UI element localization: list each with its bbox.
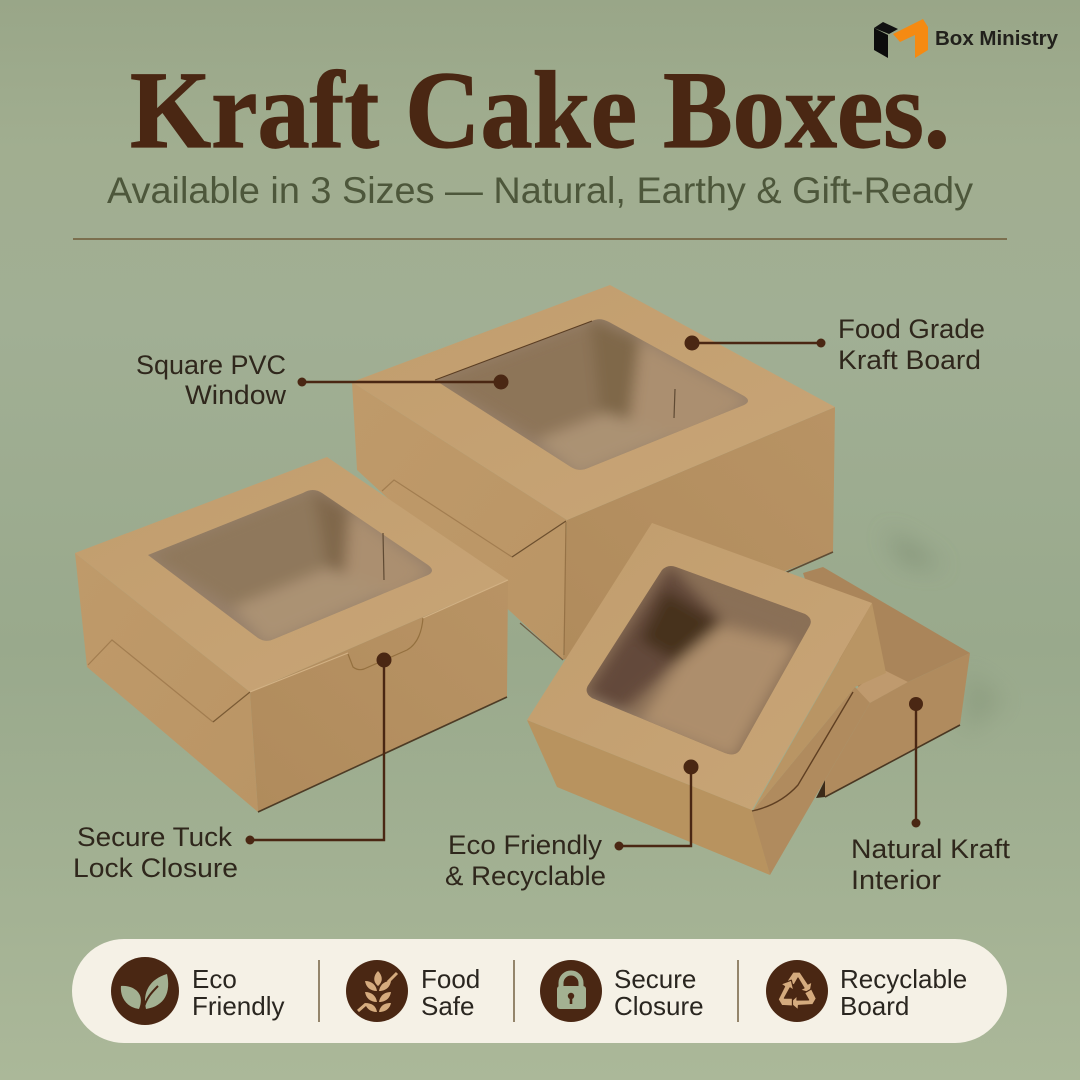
callout: food grade kraft board [684,314,985,375]
small kraft box [75,457,508,812]
subtitle: Available in 3 Sizes — Natural, Earthy & Gift-Ready [107,170,974,211]
icon: recycle [766,960,828,1022]
icon: padlock [540,960,602,1022]
callout: square PVC window [136,350,508,410]
callout: square PVC window: Square PVC [136,350,286,380]
floor shadows [885,530,1005,735]
callout: eco friendly and recyclable: Eco Friendly [448,830,603,860]
callout: secure tuck lock closure [73,652,392,883]
logo: Box Ministry [874,19,1059,58]
callout: secure tuck lock closure: Secure Tuck [77,822,233,852]
text: food safe: Food [421,964,480,994]
large kraft box [352,285,835,660]
title: Kraft Cake Boxes. [130,49,950,171]
front kraft box lid [527,523,886,875]
callout: food grade kraft board: Kraft Board [838,345,981,375]
logo: Box Ministry: Box Ministry [935,28,1059,50]
text: recyclable board: Recyclable [840,964,967,994]
callout: secure tuck lock closure: Lock Closure [73,853,238,883]
large box window [436,319,748,470]
text: eco friendly: Friendly [192,991,284,1021]
callout: natural kraft interior: Natural Kraft [851,834,1011,864]
front box window [580,560,815,760]
callout: natural kraft interior: Interior [851,865,941,895]
text: secure closure: Closure [614,991,704,1021]
callout: food grade kraft board: Food Grade [838,314,985,344]
small box window [148,490,432,641]
open box base [803,567,970,798]
text: eco friendly [192,964,284,1021]
icon: leaves [111,957,179,1025]
text: food safe: Safe [421,991,474,1021]
callout: eco friendly and recyclable: & Recyclable [445,861,606,891]
text: secure closure: Secure [614,964,696,994]
callout: natural kraft interior [851,697,1011,895]
callout: eco friendly and recyclable [445,760,698,891]
text: recyclable board: Board [840,991,909,1021]
callout: square PVC window: Window [185,380,287,410]
feature bar [72,939,1007,1043]
text: eco friendly: Eco [192,964,237,994]
icon: wheat crossed out [346,960,408,1022]
text: secure closure [614,964,704,1021]
text: food safe [421,964,480,1021]
text: recyclable board [840,964,967,1021]
